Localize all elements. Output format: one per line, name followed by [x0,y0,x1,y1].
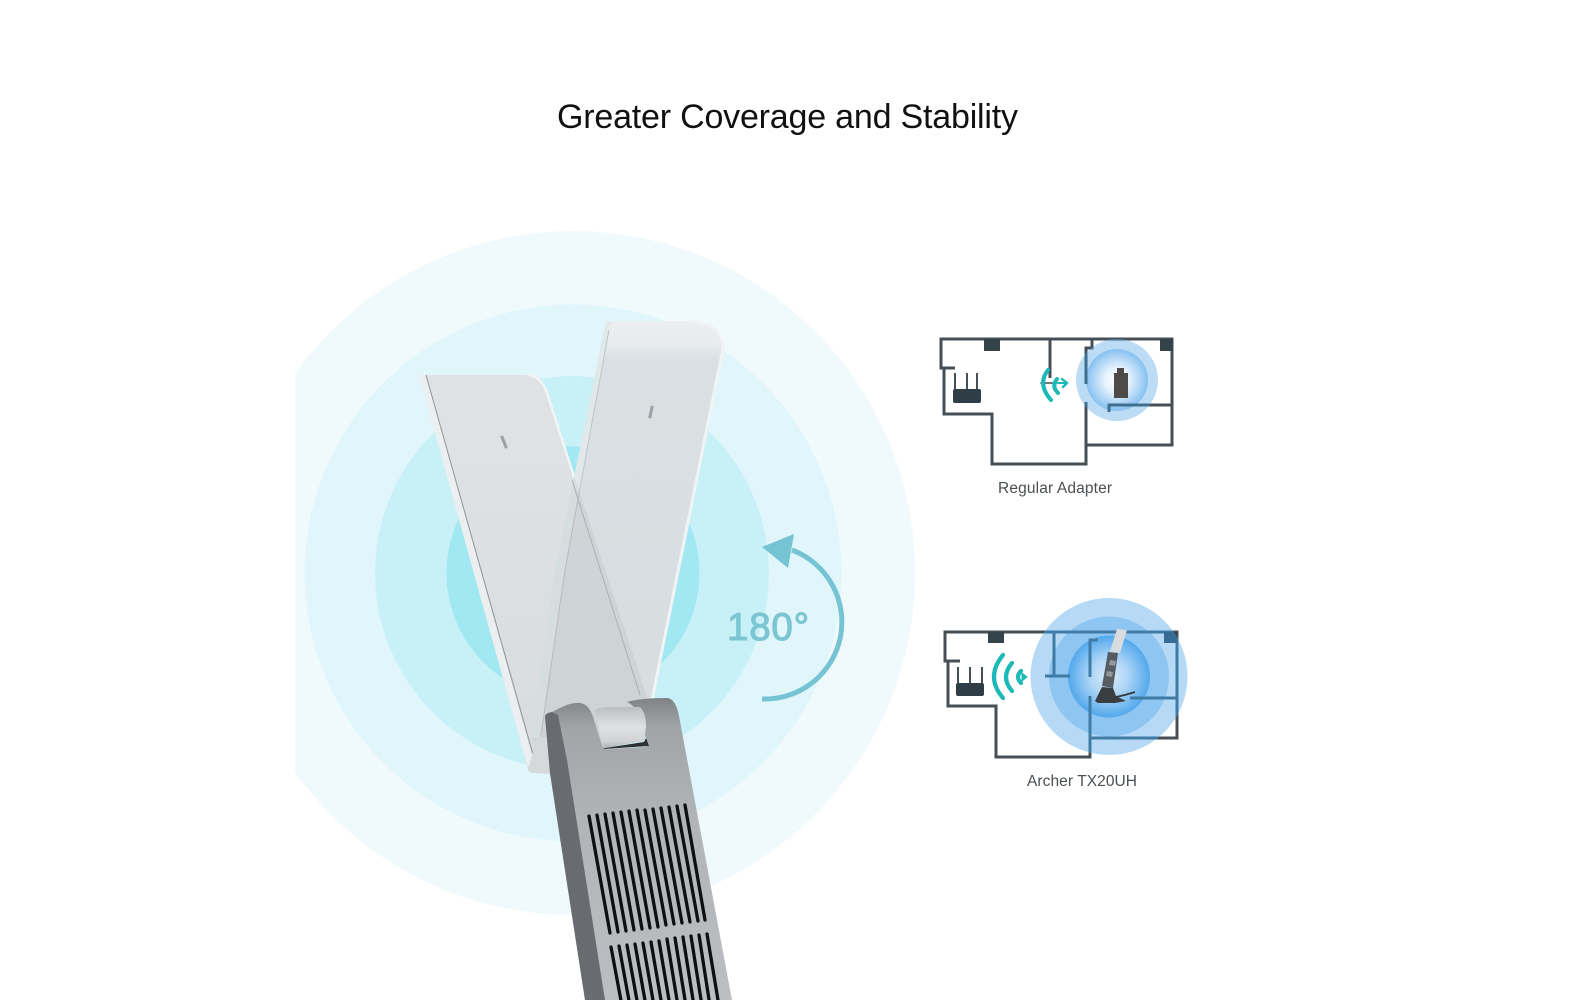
title: Greater Coverage and Stability [557,98,1018,136]
floor plan [945,632,1177,757]
floor plan [941,339,1172,464]
rotation arrow [762,534,842,699]
router icon [956,667,984,696]
label: archer tx20uh: Archer TX20UH [1027,773,1137,790]
left antenna panel [419,375,648,773]
adapter icon [1114,368,1128,398]
weak signal [1041,370,1067,400]
signal circles [1076,339,1158,421]
diagram: regular adapter [941,339,1173,464]
label: regular adapter: Regular Adapter [998,480,1112,497]
strong signal [994,655,1027,698]
right antenna panel [532,321,724,749]
router icon [953,373,981,403]
adapter side edge [545,712,605,1000]
vent slots [589,805,705,933]
corner blocks [988,632,1177,643]
signal circles [1030,598,1188,755]
coverage circles [231,231,915,915]
diagram: archer tx20uh [945,598,1188,757]
hinge [595,707,646,748]
archer adapter on stand [1095,629,1135,703]
corner blocks [984,339,1173,351]
adapter body [528,698,732,1000]
rotation label: 180° [727,606,809,649]
antenna overlap shading [531,476,648,746]
